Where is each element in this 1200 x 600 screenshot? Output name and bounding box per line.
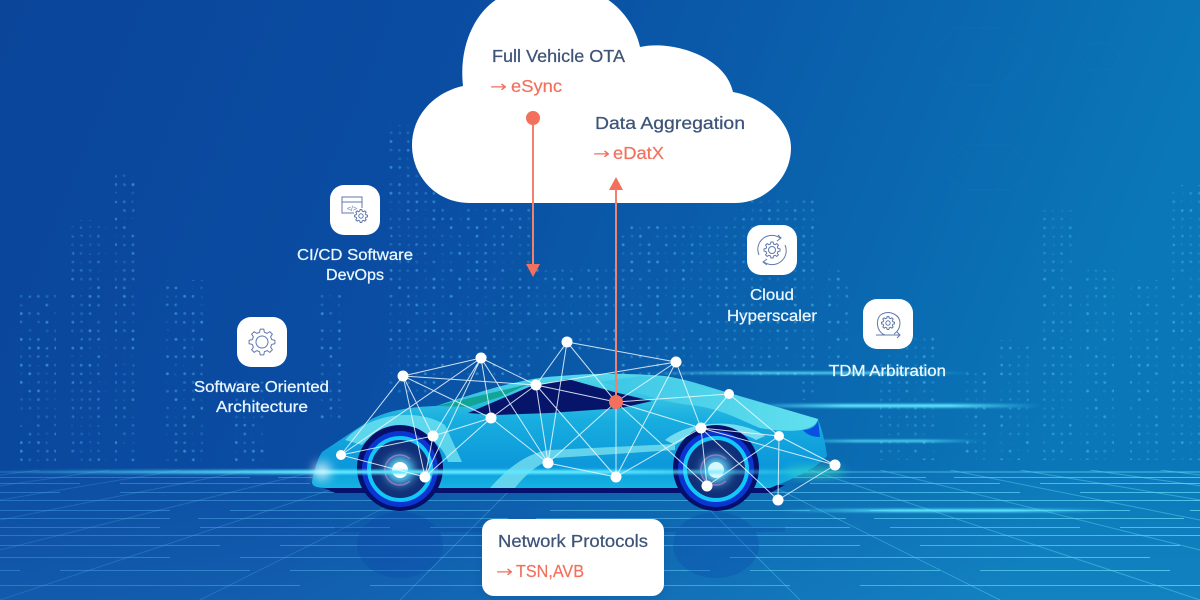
network protocols box: → (496, 562, 513, 581)
label: software oriented architecture: Architecture (216, 399, 308, 416)
car hood highlight (600, 376, 818, 431)
label: CI/CD (297, 247, 413, 284)
network protocols box (482, 519, 664, 596)
data dot skyline pattern (20, 125, 1200, 462)
cloud label: full vehicle OTA (490, 46, 625, 96)
car body (312, 374, 827, 488)
cloud label: data aggregation: → (593, 144, 610, 163)
rear wheel (673, 425, 759, 511)
icon: cloud hyperscaler gear cycle (747, 225, 797, 275)
label: cloud hyperscaler: Cloud (750, 287, 794, 304)
side window (468, 379, 652, 415)
rear fender highlight (665, 424, 765, 445)
windshield (436, 384, 529, 407)
label: cloud hyperscaler: Hyperscaler (727, 308, 817, 325)
cloud label: full vehicle OTA: eSync (511, 76, 562, 96)
front wheel (357, 425, 443, 511)
label: TDM arbitration: TDM Arbitration (829, 363, 946, 380)
floor with perspective grid (0, 470, 1200, 600)
cloud label: data aggregation: eDatX (613, 143, 664, 163)
car (312, 374, 827, 511)
arrow: cloud down to car (526, 111, 540, 277)
label: software oriented architecture (194, 379, 329, 416)
network protocols box: TSN,AVB (516, 561, 584, 581)
network edges (341, 342, 835, 500)
cloud label: data aggregation (593, 113, 745, 163)
icon: CI/CD code window (330, 185, 380, 235)
cloud label: full vehicle OTA: Full Vehicle OTA (492, 46, 625, 66)
wireframe network over car (336, 336, 840, 506)
front fender highlight (345, 415, 462, 462)
cloud label: data aggregation: Data Aggregation (595, 113, 745, 133)
network protocols box: Network Protocols (498, 531, 648, 551)
car underside (317, 485, 785, 493)
icon: gear (237, 317, 287, 367)
arrow: car up to cloud (609, 177, 623, 409)
network nodes (336, 336, 840, 506)
label: CI/CD: DevOps (326, 267, 384, 284)
side sill highlight (490, 444, 675, 488)
icon: CI/CD code window: </> (347, 206, 357, 213)
cloud (412, 0, 791, 203)
label: CI/CD: CI/CD Software (297, 247, 413, 264)
icon: TDM arbitration (863, 299, 913, 349)
label: software oriented architecture: Software Oriented (194, 379, 329, 396)
light streaks behind car (640, 372, 1110, 512)
wheel reflections (335, 512, 785, 578)
faint hexagons (925, 28, 1120, 190)
main light streak (0, 462, 860, 480)
label: cloud hyperscaler (727, 287, 817, 325)
taillight (803, 420, 820, 437)
cloud label: full vehicle OTA: → (490, 77, 507, 96)
